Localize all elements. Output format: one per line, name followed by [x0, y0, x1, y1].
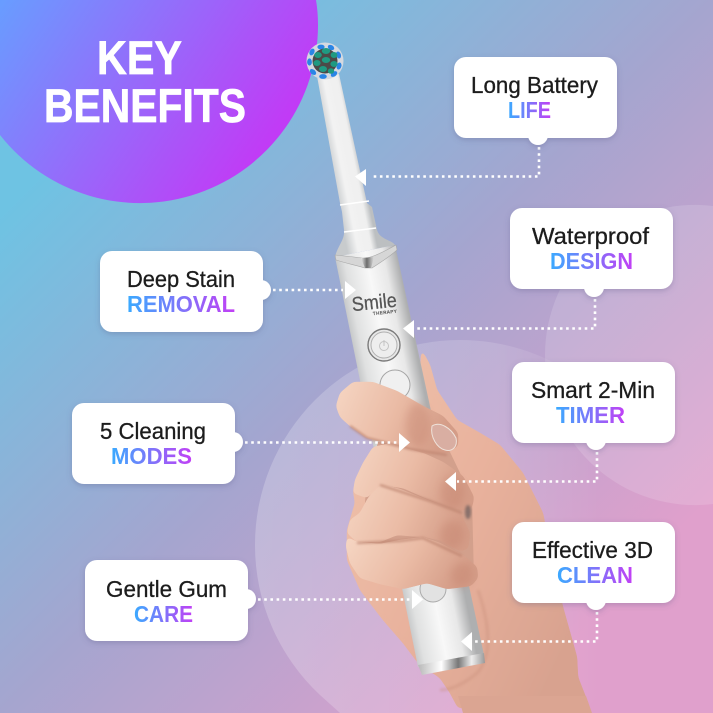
toothbrush [317, 74, 485, 675]
finger creases [350, 426, 462, 556]
hand fingers [336, 382, 478, 589]
knuckle shading [406, 403, 473, 587]
logo: Smile [351, 290, 398, 316]
connector: timer [445, 452, 597, 491]
logo: THERAPY [373, 309, 397, 316]
callout: smart timer [512, 362, 675, 450]
connector: waterproof [403, 299, 595, 338]
green bristles [313, 48, 338, 74]
arrow [355, 169, 366, 186]
title: BENEFITS [44, 79, 246, 132]
power button [368, 329, 400, 361]
fingernail [432, 424, 456, 450]
palm crease shading [440, 590, 488, 690]
connector: deep stain [273, 281, 356, 299]
callout: 5 cleaning modes: MODES [111, 443, 192, 469]
callout: effective 3D clean [512, 522, 675, 610]
index finger [336, 382, 458, 454]
lower button [420, 576, 446, 602]
connector: gum care [258, 590, 423, 609]
callout: effective 3D clean: Effective 3D [532, 537, 653, 563]
callout: smart timer: TIMER [556, 402, 625, 428]
callout: effective 3D clean: CLEAN [557, 562, 633, 588]
callout: deep stain removal: REMOVAL [127, 291, 235, 317]
callout: long battery life: LIFE [508, 97, 551, 123]
callout: long battery life: Long Battery [471, 72, 598, 98]
arrow [445, 472, 456, 491]
decorative bubble: upper right [545, 205, 713, 505]
toothbrush neck [317, 74, 395, 257]
callout: gentle gum care: CARE [134, 601, 193, 627]
neck rings [340, 201, 376, 232]
arrow [461, 632, 472, 651]
callout: long battery life [454, 57, 617, 145]
chrome collar [335, 245, 397, 268]
shadow gap [465, 505, 471, 519]
arrow [412, 590, 423, 609]
callout: 5 cleaning modes [72, 403, 243, 484]
callout: gentle gum care: Gentle Gum [106, 576, 227, 602]
pinky finger [346, 537, 478, 589]
ring finger [347, 484, 470, 551]
title [44, 31, 246, 132]
callout: waterproof design: Waterproof [532, 223, 650, 249]
callout: smart timer: Smart 2-Min [531, 377, 655, 403]
callout: waterproof design: DESIGN [550, 248, 633, 274]
brush head [306, 42, 344, 80]
hand silhouette [347, 348, 592, 713]
toothbrush body [335, 245, 484, 667]
arrow [399, 433, 410, 452]
wrist bottom [458, 696, 592, 713]
skin backing between fingers [362, 442, 474, 580]
second button [380, 370, 410, 400]
connector: cleaning modes [245, 433, 410, 452]
arrow [403, 320, 414, 338]
callout: 5 cleaning modes: 5 Cleaning [100, 418, 206, 444]
chrome base [418, 653, 485, 675]
blue bristles [307, 44, 342, 79]
decorative bubble: large lower [255, 340, 665, 713]
arrow [345, 281, 356, 299]
middle finger [353, 443, 474, 511]
callout: deep stain removal: Deep Stain [127, 266, 235, 292]
callout: waterproof design [510, 208, 673, 297]
connector: long battery [355, 147, 539, 186]
callout: deep stain removal [100, 251, 271, 332]
title: KEY [97, 31, 182, 84]
callout: gentle gum care [85, 560, 256, 641]
connector: 3D clean [461, 612, 597, 651]
title circle [0, 0, 318, 203]
collar wedge [361, 257, 374, 268]
